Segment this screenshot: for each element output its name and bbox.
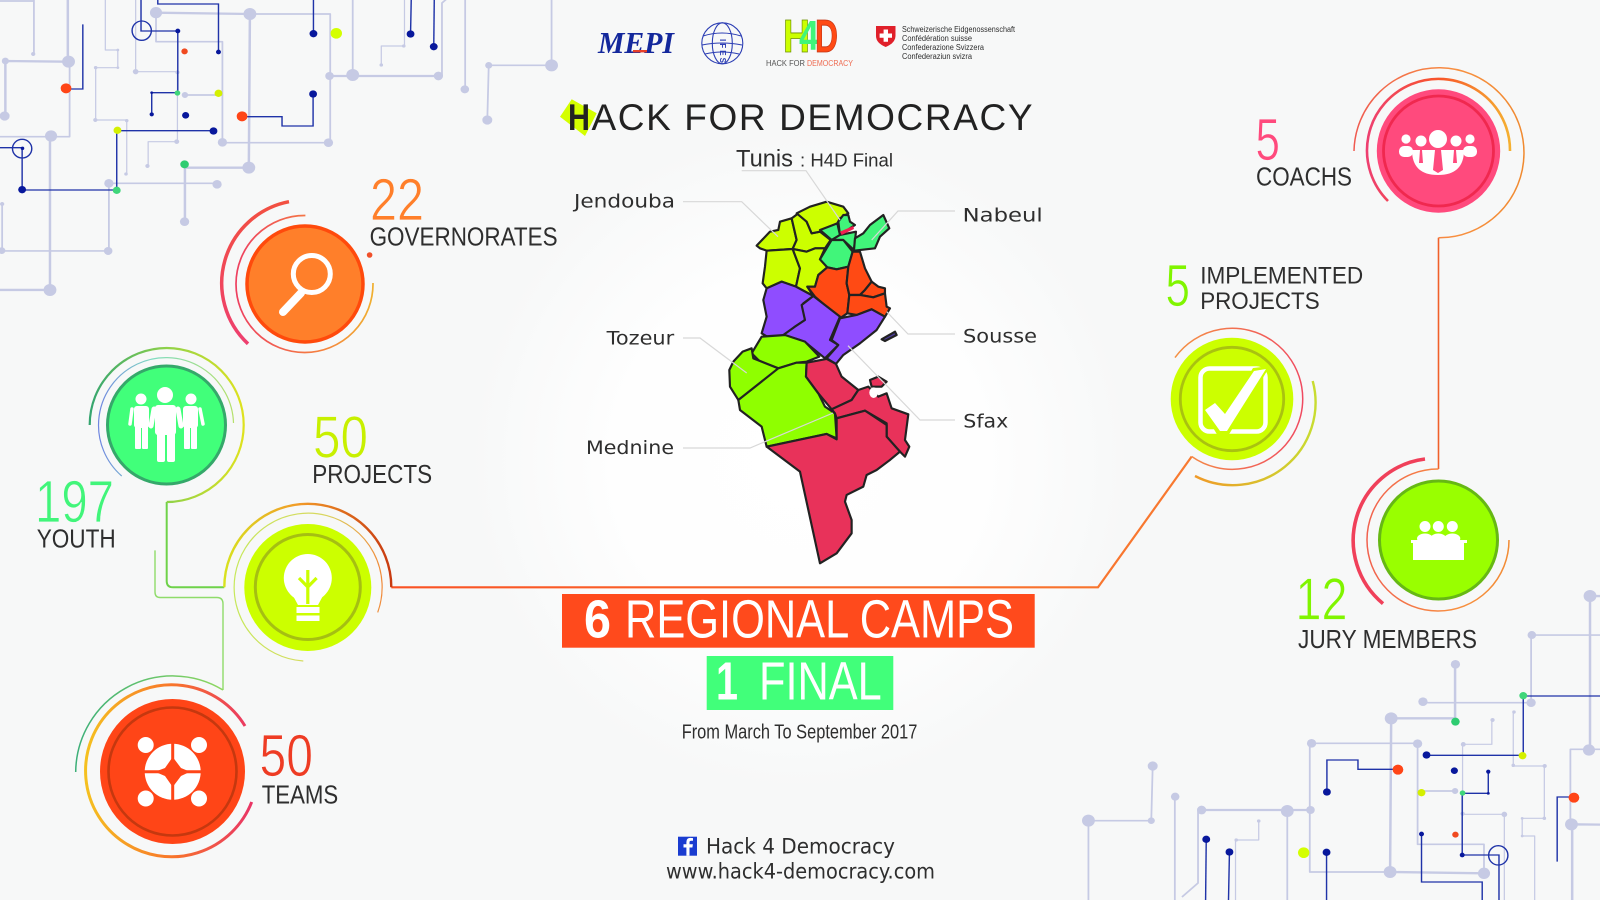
- footer: facebook and website: Hack 4 Democracy: [706, 834, 895, 858]
- logo: Swiss confederation: Schweizerische Eidgenossenschaft: [902, 25, 1016, 34]
- stat: coachs: 5: [1256, 107, 1280, 173]
- banner: 1 final: 1: [716, 651, 738, 711]
- stat: jury members: [1296, 459, 1509, 654]
- logo: MEPI: MEPI: [597, 25, 675, 60]
- stat: implemented projects: IMPLEMENTED: [1200, 262, 1363, 289]
- region group: south-east: [767, 359, 909, 563]
- connector: left stats chain: [155, 502, 224, 690]
- subtitle: Tunis H4D Final: : H4D Final: [800, 151, 893, 171]
- logo: H4D: D: [815, 10, 838, 62]
- logo: H4D: HACK FOR: [766, 58, 805, 68]
- stat: projects: 50: [313, 404, 368, 470]
- logo: Swiss confederation: Confederazione Svizzera: [902, 43, 984, 52]
- stat: implemented projects: [1166, 253, 1363, 485]
- logo: H4D: [766, 10, 853, 68]
- icon: three people: [130, 387, 203, 462]
- map labels and leader lines: [573, 171, 1043, 459]
- connector: main line to implemented projects: [391, 456, 1192, 587]
- island: Kerkennah: [882, 332, 897, 341]
- stat: implemented projects: 5: [1166, 253, 1190, 319]
- circuit decoration: top-left: [0, 0, 558, 296]
- logo: Swiss confederation: Confédération suisse: [902, 34, 973, 43]
- map labels and leader lines: Jendouba: [573, 190, 675, 212]
- map labels and leader lines: Nabeul: [963, 205, 1043, 227]
- icon: light bulb: [284, 554, 332, 621]
- logo: H4D: 4: [799, 12, 820, 59]
- icon: check box: [1200, 366, 1270, 436]
- banner: 6 regional camps: 6: [584, 589, 611, 649]
- logo: Swiss confederation: Confederaziun svizra: [902, 52, 973, 61]
- footer: facebook and website: www.hack4-democracy.com: [666, 859, 935, 883]
- stat: teams: 50: [260, 723, 313, 789]
- logo: Swiss confederation: [876, 25, 1016, 61]
- icon: group of coaches: [1399, 130, 1477, 175]
- logos row: [597, 10, 1016, 68]
- region group: south-west: [729, 335, 837, 447]
- footer: facebook and website: [666, 834, 935, 883]
- icon: magnifier: [283, 256, 330, 312]
- stat: coachs: [1256, 68, 1524, 238]
- stat: governorates: GOVERNORATES: [370, 223, 558, 251]
- banner: 6 regional camps: REGIONAL CAMPS: [625, 589, 1014, 649]
- stat: projects: [224, 404, 432, 661]
- logo: H4D: DEMOCRACY: [807, 58, 853, 68]
- banner: 1 final: [707, 651, 893, 711]
- stat: projects: PROJECTS: [312, 461, 432, 489]
- icon: facebook: [678, 837, 697, 856]
- logo: IFES globe: [702, 23, 743, 64]
- region group: Sahel: [807, 252, 890, 318]
- map labels and leader lines: Sousse: [963, 326, 1037, 348]
- region group: greater Tunis and Cap Bon: [820, 215, 889, 269]
- stat: youth: YOUTH: [37, 526, 116, 554]
- map labels and leader lines: Sfax: [963, 410, 1008, 432]
- subtitle: Tunis H4D Final: [736, 146, 893, 173]
- stat: jury members: JURY MEMBERS: [1298, 626, 1477, 654]
- stat: coachs: COACHS: [1256, 164, 1352, 192]
- stat: youth: [35, 348, 244, 554]
- subtitle: Tunis H4D Final: Tunis: [736, 146, 793, 173]
- map of Tunisia: [729, 202, 909, 563]
- logo: IFES globe: IFES: [718, 39, 727, 64]
- stat: governorates: [222, 167, 558, 352]
- region group: north-west: [757, 202, 848, 296]
- lagoon: [869, 387, 878, 398]
- logo: H4D: H: [783, 10, 810, 62]
- dates: From March To September 2017: [682, 720, 917, 743]
- stat: youth: 197: [35, 469, 114, 535]
- title: H: [568, 97, 590, 138]
- region: Tunis: [840, 226, 854, 235]
- stat: governorates: 22: [370, 167, 424, 233]
- stat: implemented projects: PROJECTS: [1200, 288, 1320, 315]
- region group: centre: [762, 282, 885, 364]
- map labels and leader lines: Tozeur: [606, 327, 674, 349]
- icon: jury at a table: [1411, 521, 1467, 560]
- map labels and leader lines: Mednine: [586, 437, 674, 459]
- banner: 1 final: FINAL: [759, 651, 882, 711]
- connector: coachs to jury: [1438, 238, 1440, 469]
- circuit decoration: bottom-right: [1082, 590, 1600, 900]
- stat: jury members: 12: [1296, 567, 1348, 633]
- stat: teams: [76, 676, 338, 857]
- icon: team around ball: [138, 737, 207, 806]
- title: ACK FOR DEMOCRACY: [592, 97, 1032, 138]
- stat: teams: TEAMS: [262, 782, 338, 810]
